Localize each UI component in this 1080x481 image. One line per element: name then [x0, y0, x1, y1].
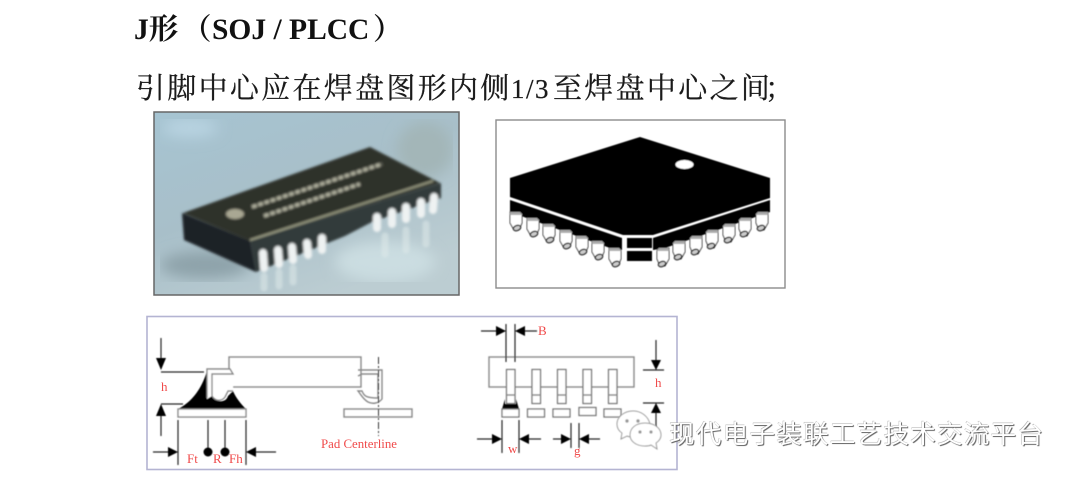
panel: lead dimension diagrams: [147, 316, 677, 470]
side view labels: Fh: [229, 451, 243, 466]
pin-1 dot: [676, 160, 694, 169]
front view labels: w: [508, 441, 518, 456]
front view diagram: [477, 324, 664, 453]
photo: SOJ chip: [154, 112, 459, 295]
solder fillet: [178, 371, 246, 409]
subtitle text: 至焊盘中心之间: [553, 72, 772, 105]
side view labels: R: [213, 451, 222, 466]
right skirt: [653, 200, 770, 250]
B dimension: [481, 324, 537, 362]
left lead: [207, 369, 233, 400]
front view labels: [508, 323, 662, 458]
title: SOJ / PLCC: [212, 14, 369, 46]
subtitle text: 引脚中心应在焊盘图形内侧: [136, 72, 512, 105]
side view diagram: [153, 338, 412, 465]
title: J形: [134, 14, 178, 46]
chip top face: [510, 137, 770, 235]
side view labels: Ft: [187, 451, 198, 466]
subtitle text: ；: [765, 73, 794, 105]
subtitle text: 1/3: [511, 74, 550, 104]
side view labels: Pad Centerline: [321, 436, 397, 451]
pad dimension: [153, 420, 276, 465]
w and g dimensions: [477, 420, 600, 453]
side view labels: [161, 379, 397, 466]
side view labels: h: [161, 379, 168, 394]
corner notch blocks: [627, 238, 652, 248]
front view labels: B: [538, 323, 547, 338]
illustration: PLCC chip: [496, 120, 785, 288]
front view labels: h: [655, 375, 662, 390]
right h dimension: [643, 340, 664, 428]
left skirt: [510, 200, 622, 250]
title: （: [182, 14, 212, 46]
title: ）: [373, 14, 403, 46]
watermark text: 现代电子装联工艺技术交流平台: [669, 414, 1044, 451]
icon: wechat watermark: [617, 411, 661, 449]
h dimension: [161, 338, 204, 436]
right lead: [358, 370, 382, 403]
front view labels: g: [574, 443, 581, 458]
